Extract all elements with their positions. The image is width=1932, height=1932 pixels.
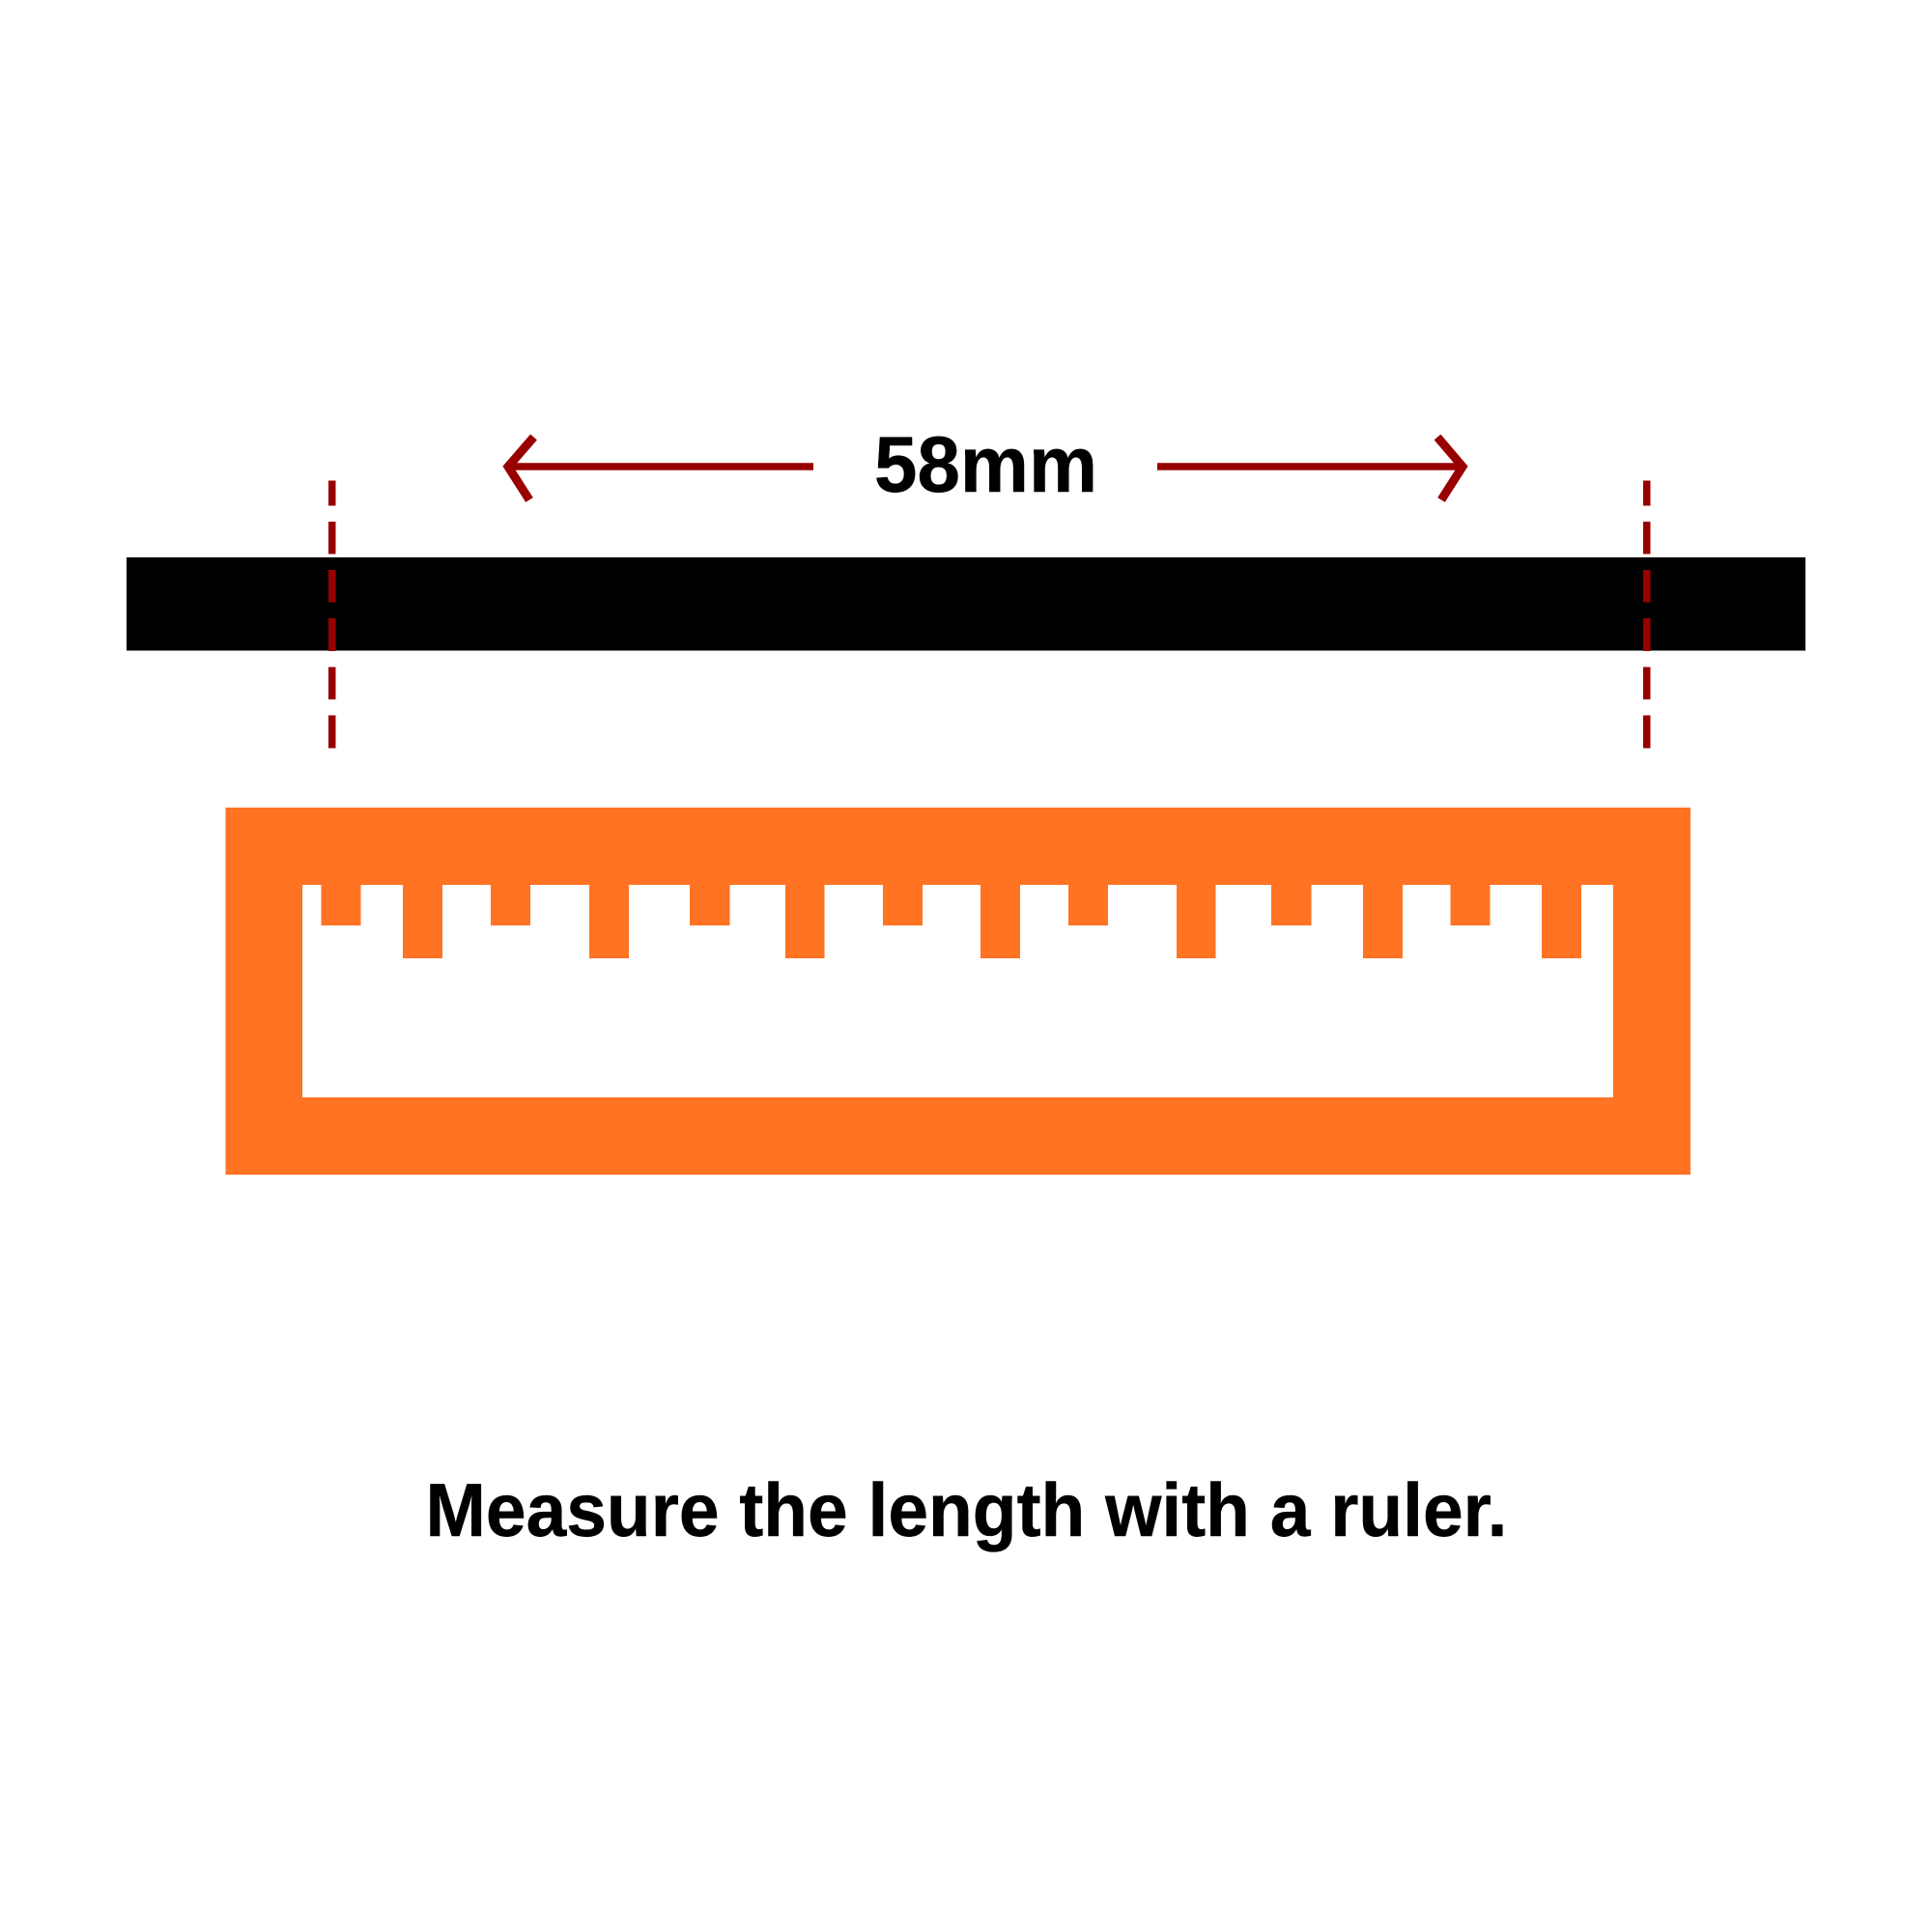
left dimension arrow (508, 437, 813, 500)
measurement label: 58mm: 58mm (874, 421, 1097, 509)
left dashed measurement guide (328, 481, 336, 748)
right dashed measurement guide (1643, 481, 1650, 748)
caption: Measure the length with a ruler. (425, 1467, 1507, 1552)
orange ruler with tick marks (226, 808, 1690, 1175)
measured object: black strip (127, 557, 1805, 651)
right dimension arrow (1157, 437, 1463, 500)
